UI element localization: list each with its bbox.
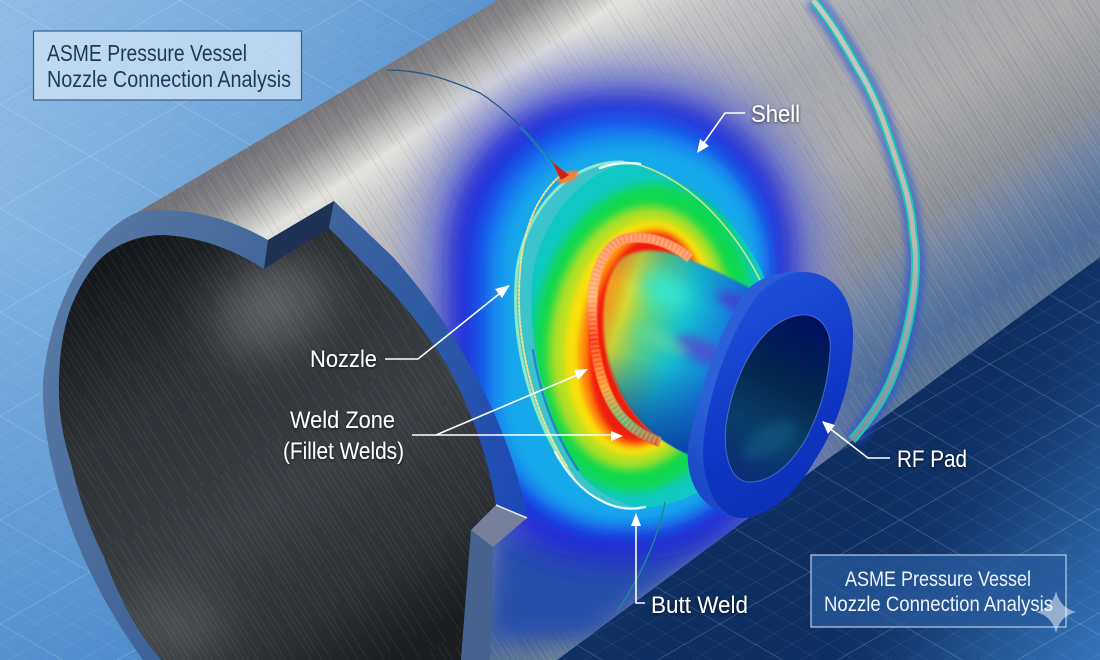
flange bore: nozzle opening — [725, 315, 830, 482]
notch face: upper cut — [264, 201, 334, 269]
label: RF Pad — [822, 421, 967, 473]
label: Butt Weld: Butt Weld — [651, 592, 748, 619]
label: RF Pad: RF Pad — [897, 446, 967, 473]
label: Butt Weld — [631, 513, 748, 619]
wall strip below lower notch — [461, 530, 493, 660]
label: Nozzle — [310, 285, 510, 373]
nozzle weld: fillet weld bead — [592, 238, 690, 442]
flange: RF pad ring — [688, 272, 853, 518]
vessel interior: dark brushed surface — [58, 228, 496, 660]
label: Shell — [697, 101, 800, 153]
icon: sparkle star — [1036, 591, 1076, 633]
title box: top left: Nozzle Connection Analysis — [47, 66, 291, 92]
circumferential weld band on shell — [813, 0, 915, 440]
longitudinal seam: lower thin weld — [618, 502, 665, 610]
label: Weld Zone: Weld Zone — [290, 407, 395, 434]
label: Shell: Shell — [751, 101, 800, 128]
label: Weld Zone — [283, 369, 623, 465]
vessel open end: cut wall ring — [43, 201, 527, 660]
title box: top left: ASME Pressure Vessel — [47, 40, 247, 66]
title box: bottom right: Nozzle Connection Analysis — [824, 593, 1053, 616]
title box: bottom right — [811, 555, 1066, 627]
label: Weld Zone: (Fillet Welds) — [283, 438, 404, 465]
notch face: lower cut — [471, 505, 527, 547]
heat map: nozzle pad contours — [512, 162, 777, 508]
label: Nozzle: Nozzle — [310, 346, 377, 373]
longitudinal seam: upper thin weld — [387, 70, 580, 186]
heat map: stress contours on shell — [405, 55, 835, 640]
weld seam: outer butt weld ring — [516, 162, 760, 510]
nozzle neck: flared body — [603, 251, 760, 470]
title box: bottom right: ASME Pressure Vessel — [845, 568, 1031, 591]
title box: top left — [34, 31, 302, 100]
